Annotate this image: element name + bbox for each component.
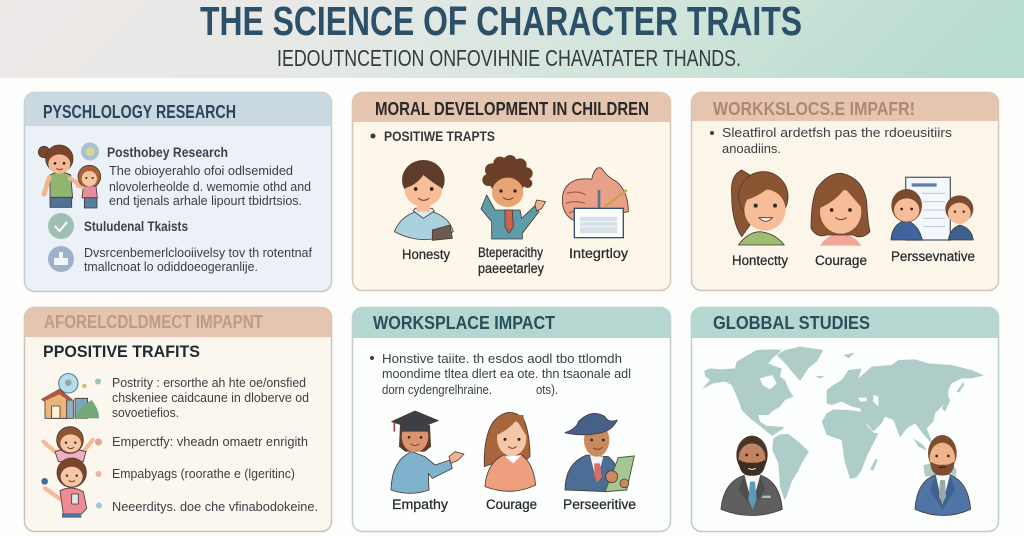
panel heading bar: global studies xyxy=(692,308,998,338)
icon: check mark circle xyxy=(48,213,74,239)
text: trait descriptions: Postrity : ersorthe ah hte oe/onsfied xyxy=(112,375,306,390)
heading: development impact: AFORELCDLDMECT IMPAPNT xyxy=(44,311,264,332)
panel heading bar: workplace upper xyxy=(692,92,998,121)
panel heading bar: psychology research xyxy=(24,92,332,126)
panel: moral development in children xyxy=(352,92,670,290)
icon: woman with long hair xyxy=(484,412,536,491)
text: research description: end tjenals arhale lipourt tbidrtsios. xyxy=(109,193,302,208)
icon: child with phone xyxy=(41,458,87,518)
panel: global studies xyxy=(692,308,998,532)
text: research description: nlovolerheolde d. wemomie othd and xyxy=(109,179,311,194)
heading: workplace upper: WORKKSLOCS.E IMPAFR! xyxy=(713,98,915,119)
label: courage: Courage xyxy=(486,497,537,512)
heading: psychology research: PYSCHLOLOGY RESEARCH xyxy=(43,101,236,122)
text: description with bullet: moondime tltea dlert ea ote. thn tsaonale adl xyxy=(382,366,631,381)
label: honesty: Hontectty xyxy=(732,253,788,268)
panel: workplace impact upper xyxy=(692,92,998,290)
icon: smiling girl with ponytail xyxy=(731,170,788,245)
header banner xyxy=(0,0,1024,78)
text: description with bullet: ots). xyxy=(536,382,558,397)
text: trait descriptions: sovoetiefios. xyxy=(112,405,179,420)
panel: development impact xyxy=(24,308,332,532)
icon: smiling boy with book xyxy=(394,160,453,240)
text: description with bullet: anoadiins. xyxy=(722,141,781,156)
label: second trait: paeeetarley xyxy=(478,261,544,276)
label: courage: Courage xyxy=(815,253,867,268)
bullet heading: positive traits: POSITIWE TRAPTS xyxy=(384,129,495,144)
text: trait descriptions xyxy=(112,375,318,514)
label: second trait: Bteperacithy xyxy=(478,245,543,260)
text: description with bullet: Honstive taiite. th esdos aodl tbo ttlomdh xyxy=(382,351,622,366)
sub-heading: positive traits: PPOSITIVE TRAFITS xyxy=(43,342,200,361)
text: trait descriptions: Neeerditys. doe che vfinabodokeine. xyxy=(112,499,318,514)
icon: girl with raised arms xyxy=(43,427,93,462)
text: description with bullet xyxy=(710,125,953,156)
icon: man in hat with tablet xyxy=(565,413,634,492)
label: empathy: Empathy xyxy=(392,497,448,512)
icon: man with glasses in blue suit xyxy=(915,435,971,515)
world map xyxy=(702,347,984,500)
text: traits description xyxy=(84,245,312,274)
text: sub-heading traits: Stuludenal Tkaists xyxy=(84,219,188,234)
panel heading bar: workplace impact xyxy=(352,308,670,338)
panel heading bar: moral development xyxy=(352,92,670,122)
label: integrity: Integrtloy xyxy=(569,246,628,261)
text: research description: The obioyerahlo ofoi odlsemided xyxy=(109,163,293,178)
text: description with bullet: dorn cydengrelhraine. xyxy=(382,382,492,397)
label: honesty: Honesty xyxy=(402,247,450,262)
label: perseverance: Perseeritive xyxy=(563,497,636,512)
text: traits description: tmallcnoat lo odiddoeogeranlije. xyxy=(84,259,258,274)
text: description with bullet: Sleatfirol ardetfsh pas the rdoeusitiirs xyxy=(722,125,953,140)
icon: house and city xyxy=(42,374,99,418)
list: trait bullets xyxy=(95,378,102,508)
heading: workplace impact: WORKSPLACE IMPACT xyxy=(373,312,556,333)
heading: global studies: GLOBBAL STUDIES xyxy=(713,312,870,333)
label: second trait xyxy=(478,245,544,276)
heading: moral development: MORAL DEVELOPMENT IN CHILDREN xyxy=(375,98,649,119)
text: research description xyxy=(109,163,311,208)
icon: bearded man in grey suit xyxy=(721,436,782,515)
icon: small round badge xyxy=(81,142,99,160)
icon: stamp circle xyxy=(48,246,74,272)
text: trait descriptions: Emperctfy: vheadn omaetr enrigith xyxy=(112,434,308,449)
panel heading bar: development impact xyxy=(24,308,332,337)
icon: two children holding hands xyxy=(38,145,101,208)
icon: curly-haired boy waving xyxy=(481,155,546,239)
text: traits description: Dvsrcenbemerlclooiivelsy tov th rotentnaf xyxy=(84,245,312,260)
subtitle: IEDOUTNCETION ONFOVIHNIE CHAVATATER THANDS. xyxy=(277,45,741,71)
text: description with bullet xyxy=(370,351,631,397)
label: perseverance: Perssevnative xyxy=(891,249,975,264)
icon: graduate gesturing xyxy=(391,411,464,493)
icon: hand holding pencil and card xyxy=(562,168,628,238)
text: trait descriptions: chskeniee caidcaune in dloberve od xyxy=(112,390,309,405)
text: trait descriptions: Empabyags (roorathe e (lgeritinc) xyxy=(112,466,295,481)
panel: workplace impact xyxy=(352,308,670,532)
icon: girl with long hair xyxy=(811,173,870,246)
icon: two boys with document xyxy=(891,177,973,240)
text: research sub-heading: Posthobey Research xyxy=(107,145,228,160)
panel: psychology research xyxy=(24,92,332,292)
